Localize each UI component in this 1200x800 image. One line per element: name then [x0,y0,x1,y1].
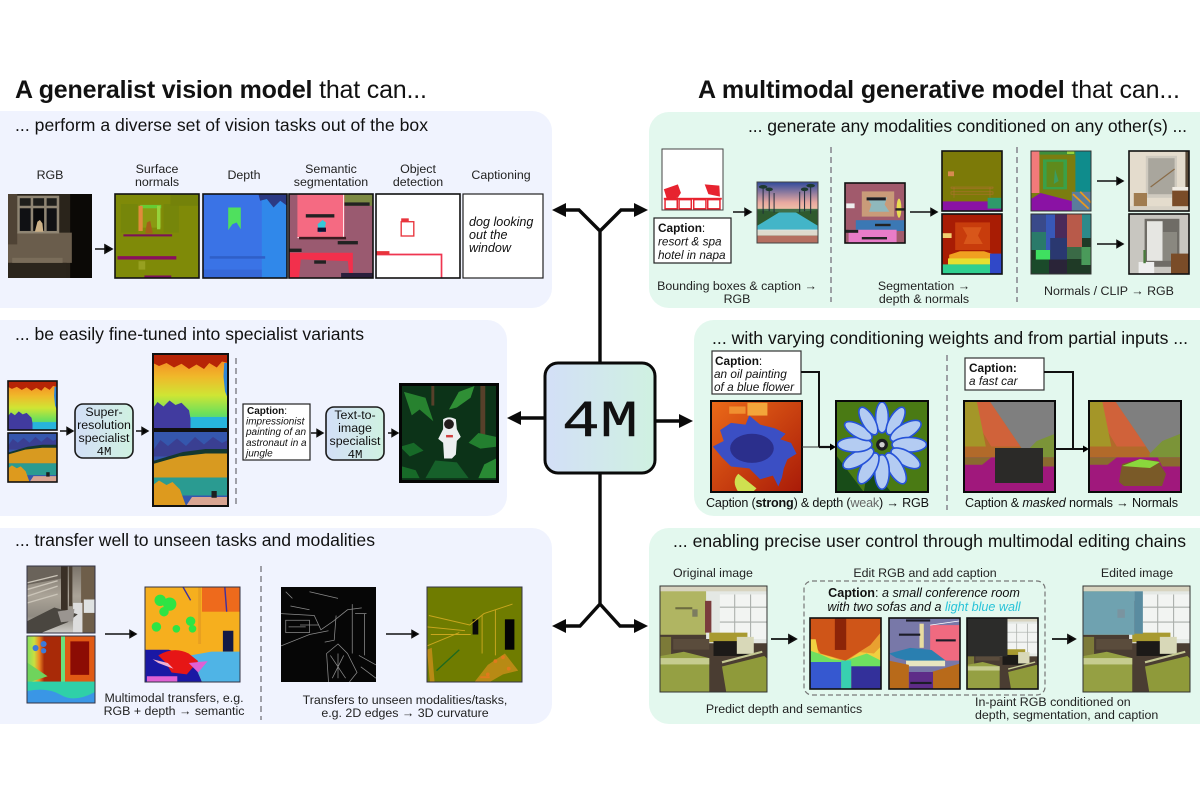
box: super-resolution specialist: resolution [77,418,131,432]
panel heading: ... generate any modalities conditioned on any other(s) ... [748,116,1187,136]
label: multimodal transfers: Multimodal transfers, e.g. [104,691,244,705]
image: masked RGB [967,618,1038,689]
label: surface normals: Surface [136,162,178,176]
box: super-resolution specialist: 4M [97,445,111,459]
image: RGB input [8,194,92,278]
box: text-to-image specialist: specialist [330,434,381,448]
box: super-resolution specialist: specialist [79,431,130,445]
label: unseen transfers: Transfers to unseen modalities/tasks, [303,693,507,707]
label: boxes and caption to RGB: Bounding boxes & caption → [657,279,817,293]
arrow: to conditioning weights [656,414,693,428]
caption box: Caption: [969,361,1017,375]
central 4M box [545,363,655,473]
label: captioning: Captioning [471,168,531,182]
box: text-to-image specialist [326,407,384,462]
panel heading: ... enabling precise user control through multimodal editing chains [673,531,1186,551]
label: normals / CLIP to RGB: Normals / CLIP → RGB [1044,284,1174,298]
image: completed normals with car [1089,401,1181,492]
image: surface normals [115,194,199,278]
image: object detection [376,194,460,278]
box: text-to-image specialist: Text-to- [334,408,376,422]
image: depth output [942,214,1002,274]
caption box: a fast car [969,374,1019,388]
caption box: an oil painting [714,367,787,381]
image: low-res RGB [8,433,57,482]
label: RGB: RGB [37,168,63,182]
caption box [654,218,731,263]
central 4M box: 4M [562,394,638,452]
connector: caption and masked normals [1044,372,1089,452]
caption text: with two sofas and a [827,600,945,614]
image: CLIP input [1031,214,1091,274]
image: RGB office [27,566,95,633]
panel: conditional generation [649,112,1200,308]
image: masked normals [964,401,1055,492]
image: low-res depth [8,381,57,430]
arrow [386,630,418,638]
label: semantic segmentation: segmentation [294,175,368,189]
caption result: out the [469,228,508,242]
caption box: Caption [247,406,284,417]
label: predict depth and semantics: Predict depth and semantics [706,702,862,716]
image: semantic segmentation [289,194,373,278]
caption box [712,351,801,394]
caption box [243,404,310,460]
caption result [463,194,543,278]
panel heading: ... perform a diverse set of vision tasks out of the box [15,115,428,135]
caption box: : [702,221,705,235]
image: generated bathroom [1129,214,1189,274]
box: super-resolution specialist [75,404,133,459]
label: segmentation to depth and normals: depth & normals [879,292,969,306]
box: super-resolution specialist: Super- [85,405,123,419]
panel heading: ... be easily fine-tuned into specialist variants [15,324,364,344]
caption box: : [759,354,762,368]
arrow [771,635,796,643]
label: semantic segmentation: Semantic [305,162,357,176]
central connector: upper fork [552,203,648,362]
box: text-to-image specialist: image [338,421,372,435]
caption box: of a blue flower [714,380,795,394]
arrow [95,245,112,253]
caption result: window [469,241,512,255]
caption box: : [284,406,287,417]
caption box [965,358,1044,390]
label: in-paint RGB: In-paint RGB conditioned on [975,695,1131,709]
caption text: : a small conference room [875,586,1020,600]
caption result: dog looking [469,215,533,229]
caption text: light blue wall [945,600,1022,614]
image: high-res RGB [153,431,228,506]
caption box: jungle [244,448,273,459]
arrow [311,430,323,436]
label: unseen transfers: e.g. 2D edges → 3D curvature [321,706,489,720]
label: object detection: detection [393,175,443,189]
image: bounding boxes [662,149,723,210]
image: astronaut in a jungle [400,384,498,482]
image: generated flower [836,401,928,492]
label: edit RGB: Edit RGB and add caption [853,566,997,580]
caption box: resort & spa [658,234,722,248]
arrow [60,428,73,434]
arrow [1052,635,1075,643]
arrow: to specialist variants [507,411,544,425]
image: predicted depth [810,618,881,689]
panel: transfer to unseen tasks [0,528,552,724]
caption box: Caption [715,354,759,368]
label: caption and depth to RGB: Caption (strong) & depth (weak) → RGB [706,496,929,510]
panel: vision tasks [0,111,552,308]
panel: conditioning weights [694,320,1200,516]
arrow [388,430,398,436]
label: original image: Original image [673,566,753,580]
label: edited image: Edited image [1101,566,1173,580]
central connector: lower fork [552,474,648,633]
image: depth flower [711,401,802,492]
label: boxes and caption to RGB: RGB [724,292,750,306]
image: depth office [27,636,95,703]
caption text: Caption [828,586,875,600]
image: predicted semantics [889,618,960,689]
label: multimodal transfers: RGB + depth → semantic [104,704,244,718]
caption box: painting of an [245,427,306,438]
image: resort [757,182,818,243]
image: edited room [1083,586,1190,692]
caption box: impressionist [246,417,306,428]
label: depth: Depth [227,168,261,182]
image: original room [660,586,767,692]
title: generalist vision model: A generalist vision model that can... [15,76,427,104]
caption box: hotel in napa [658,248,726,262]
panel heading: ... with varying conditioning weights and from partial inputs ... [712,328,1188,348]
label: in-paint RGB: depth, segmentation, and caption [975,708,1158,722]
arrow [733,208,751,216]
image: normals output [942,151,1002,211]
image: high-res depth [153,354,228,429]
arrow [1097,240,1123,248]
caption box: Caption [658,221,702,235]
panel: multimodal editing [649,528,1200,724]
label: segmentation to depth and normals: Segmentation → [878,279,970,293]
panel: specialist variants [0,320,507,516]
arrow [910,208,937,216]
image: depth [203,194,287,278]
image: 3D curvature [427,587,522,682]
label: surface normals: normals [135,175,179,189]
caption box: astronaut in a [246,438,307,449]
panel heading: ... transfer well to unseen tasks and modalities [15,530,375,550]
edit group [804,581,1045,695]
connector: strong caption and weak depth [801,372,836,450]
image: segmentation input [845,183,910,243]
label: masked normals to normals: Caption & masked normals → Normals [965,496,1178,510]
arrow [1097,178,1123,184]
arrow [136,428,148,434]
title: multimodal generative model: A multimodal generative model that can... [698,76,1180,104]
box: text-to-image specialist: 4M [348,448,362,462]
arrow [105,630,136,638]
image: 2D edges [281,587,376,682]
label: object detection: Object [400,162,436,176]
image: semantic output [145,587,240,682]
image: normals input [1031,151,1091,211]
image: generated bathroom [1129,151,1189,211]
